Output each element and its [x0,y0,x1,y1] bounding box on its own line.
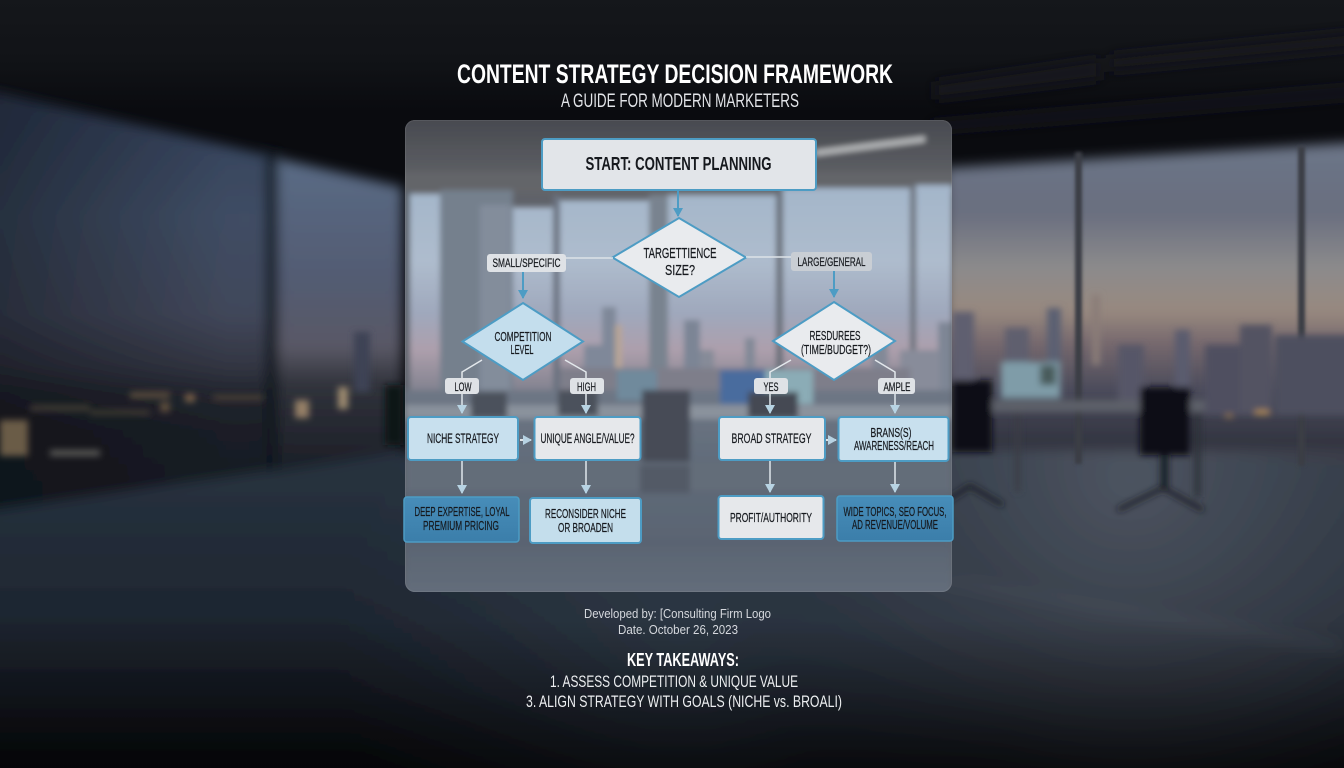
outcome: wide topics: WIDE TOPICS, SEO FOCUS, [844,505,946,519]
start box: START: CONTENT PLANNING [586,154,772,174]
decision: competition level [462,303,583,380]
label: small/specific [487,254,566,272]
connectors: resources branches [770,360,895,378]
outcome: reconsider niche: OR BROADEN [558,521,613,535]
label: yes: YES [764,380,778,394]
credits [584,607,771,637]
key takeaways [526,650,842,711]
box: niche strategy: NICHE STRATEGY [427,431,499,446]
label: yes [754,378,788,394]
decision: resources [773,302,895,380]
arrow: start to audience [677,190,679,216]
label: low [445,378,479,394]
label: low: LOW [454,380,472,394]
box: niche strategy [408,417,518,460]
subtitle: A GUIDE FOR MODERN MARKETERS [561,91,799,112]
outcome: wide topics [837,496,953,541]
arrow: niche to unique [520,439,531,441]
outcome: profit/authority [718,496,824,539]
panel: translucent flowchart backdrop [400,115,960,595]
box: brand awareness: BRANS(S) [870,426,912,440]
decision: target audience size: TARGETTIENCE [644,245,716,262]
decision: competition level: LEVEL [510,343,534,357]
credits: Date. October 26, 2023 [618,623,738,637]
bottom shade [0,620,1344,768]
box: brand awareness [838,417,948,461]
connectors: competition branches [462,360,586,378]
box: broad strategy [719,417,825,460]
start box [542,139,816,190]
label: small/specific: SMALL/SPECIFIC [492,256,561,270]
box: broad strategy: BROAD STRATEGY [732,431,812,446]
label: ample: AMPLE [884,380,910,394]
decision: target audience size [612,218,746,297]
label: ample [878,378,915,394]
outcome: deep expertise [404,497,519,542]
outcome: reconsider niche [530,498,641,543]
arrows: strategy row to outcome row [462,461,895,493]
title: CONTENT STRATEGY DECISION FRAMEWORK [457,59,893,89]
box: unique angle: UNIQUE ANGLE/VALUE? [540,431,634,446]
label: large/general: LARGE/GENERAL [798,255,866,269]
flowchart [404,139,953,543]
label: high [570,378,604,394]
decision: resources: RESDUREES [810,329,860,343]
decision: target audience size: SIZE? [665,262,695,279]
key takeaways: 1. ASSESS COMPETITION & UNIQUE VALUE [550,672,798,691]
outcome: wide topics: AD REVENUE/VOLUME [852,518,938,532]
box: brand awareness: AWARENESS/REACH [854,439,934,453]
arrow: large to resources [833,271,835,297]
arrow: broad to brand [826,439,836,441]
outcome: deep expertise: PREMIUM PRICING [423,519,499,533]
decision: resources: (TIME/BUDGET?) [801,343,871,357]
box: unique angle [534,417,640,460]
arrows: branches to strategy row [462,394,895,413]
outcome: profit/authority: PROFIT/AUTHORITY [730,510,812,525]
label: high: HIGH [577,380,596,394]
arrow: small to competition [522,272,524,298]
key takeaways: 3. ALIGN STRATEGY WITH GOALS (NICHE vs. BROALI) [526,692,842,711]
connector: audience to small [566,257,613,259]
connector: audience to large [746,256,791,258]
label: large/general [791,252,872,271]
key takeaways: KEY TAKEAWAYS: [627,650,739,670]
outcome: deep expertise: DEEP EXPERTISE, LOYAL [414,505,510,519]
outcome: reconsider niche: RECONSIDER NICHE [545,507,626,521]
decision: competition level: COMPETITION [494,330,552,344]
credits: Developed by: [Consulting Firm Logo [584,607,771,621]
